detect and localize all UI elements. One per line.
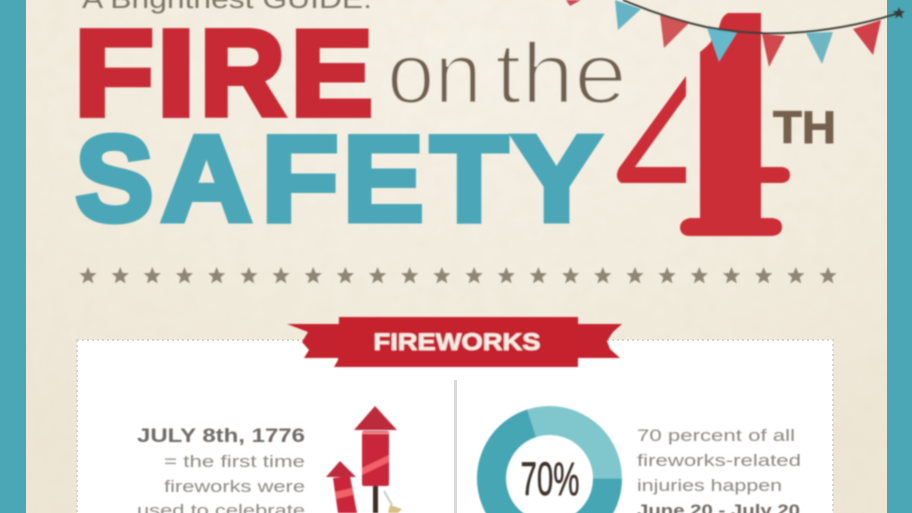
bunting banner bbox=[566, 0, 905, 67]
title word: FIRE: I bbox=[157, 5, 195, 141]
text block: July 8th 1776: fireworks were bbox=[164, 477, 305, 496]
large numeral 4 bbox=[617, 13, 790, 236]
title word: SAFETY: E bbox=[343, 110, 424, 246]
title word: SAFETY: Y bbox=[512, 110, 601, 246]
text block: injuries statistic bbox=[637, 426, 801, 513]
title words: on the: the bbox=[495, 26, 627, 122]
large rocket bbox=[354, 406, 397, 486]
donut chart: 70 percent: 70% bbox=[520, 452, 580, 505]
title word: SAFETY bbox=[76, 110, 601, 246]
divider row of stars bbox=[79, 267, 837, 283]
text block: July 8th 1776: = the first time bbox=[164, 452, 305, 471]
panel card bbox=[77, 340, 833, 513]
title block bbox=[74, 0, 836, 246]
text block: injuries statistic: injuries happen bbox=[637, 476, 782, 495]
small rocket bbox=[326, 461, 357, 513]
title word: FIRE: R bbox=[200, 5, 285, 141]
bunting star knot bbox=[893, 7, 905, 18]
title words: on the bbox=[387, 26, 627, 122]
ribbon heading: FIREWORKS bbox=[287, 317, 622, 367]
text block: July 8th 1776: JULY 8th, 1776 bbox=[137, 426, 305, 447]
ribbon heading: FIREWORKS: FIREWORKS bbox=[374, 329, 540, 356]
rocket fuse bbox=[384, 491, 392, 505]
left teal border bbox=[0, 0, 26, 513]
panel: fireworks bbox=[77, 317, 833, 513]
title word: FIRE: E bbox=[291, 5, 373, 141]
bunting string bbox=[623, 0, 899, 33]
donut chart: 70 percent bbox=[492, 420, 608, 513]
column divider bbox=[454, 380, 457, 513]
title word: SAFETY: T bbox=[430, 110, 508, 246]
title word: SAFETY: F bbox=[262, 110, 338, 246]
superscript TH: TH bbox=[773, 102, 836, 153]
icon: rockets bbox=[326, 406, 402, 513]
title word: SAFETY: S bbox=[76, 110, 154, 246]
right teal border bbox=[887, 0, 912, 513]
bunting flags bbox=[566, 0, 881, 67]
title words: on the: on bbox=[387, 26, 482, 122]
title word: FIRE: F bbox=[74, 5, 154, 141]
rocket stick bbox=[373, 486, 378, 513]
spark bbox=[388, 505, 402, 513]
text block: injuries statistic: fireworks-related bbox=[637, 451, 801, 470]
title word: SAFETY: A bbox=[161, 110, 252, 246]
text block: July 8th 1776 bbox=[137, 426, 305, 513]
text block: injuries statistic: 70 percent of all bbox=[637, 426, 795, 445]
title word: FIRE bbox=[74, 5, 373, 141]
